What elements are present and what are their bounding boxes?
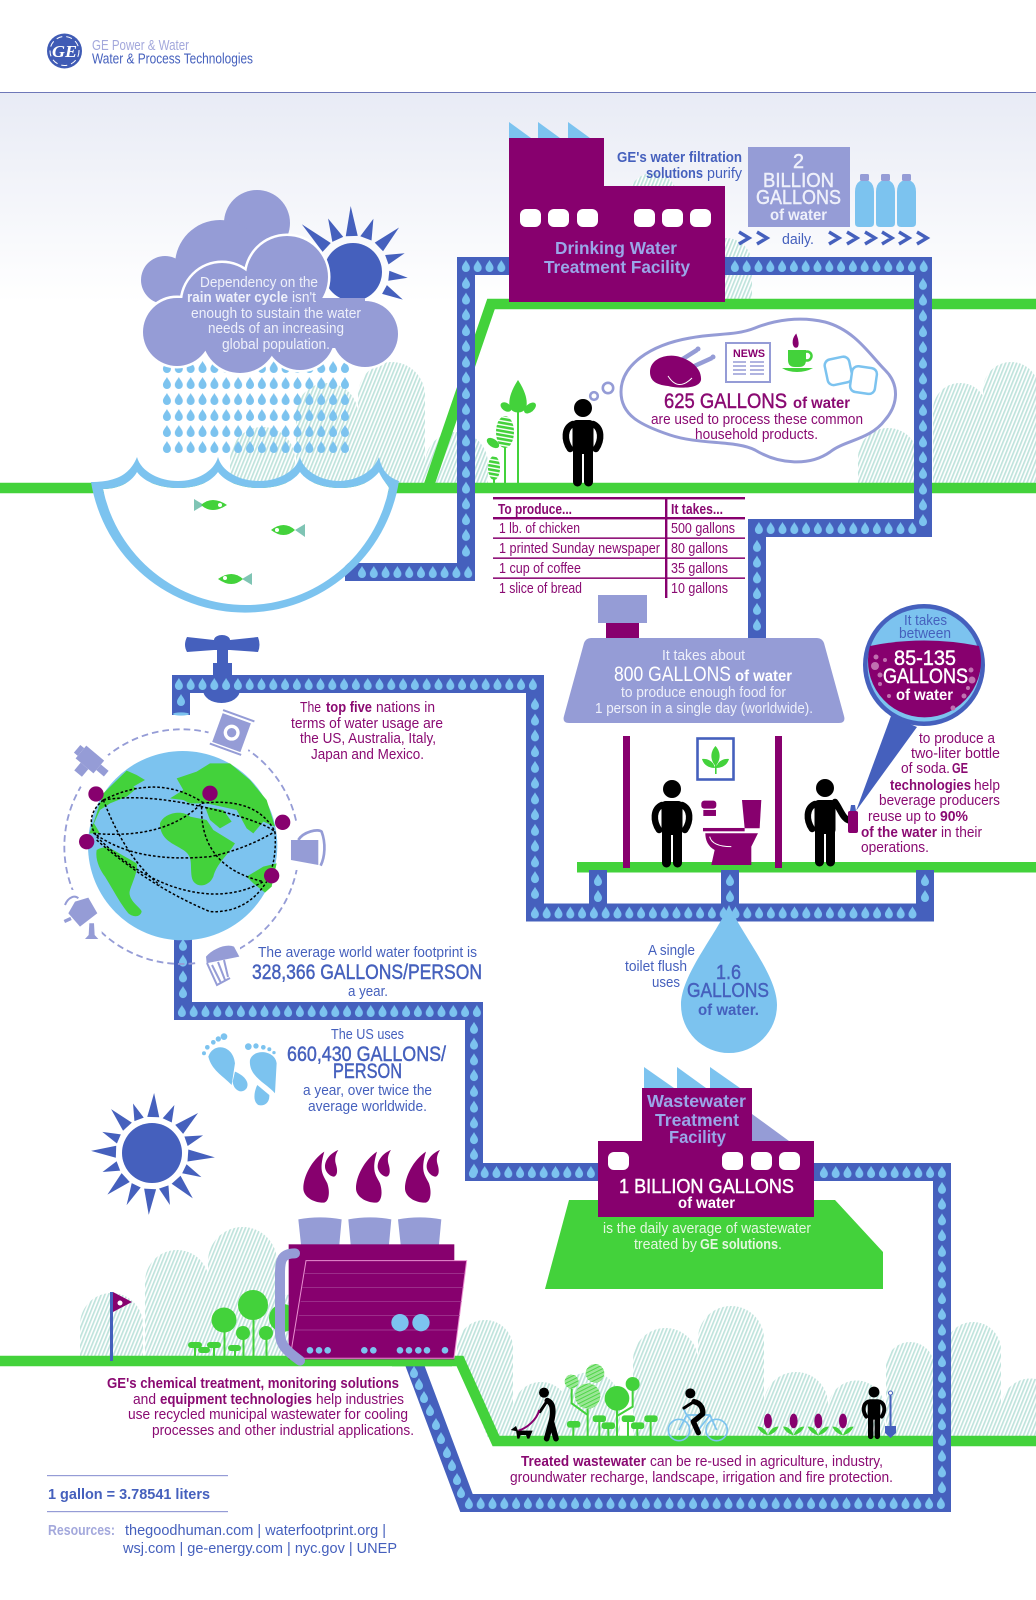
icon: thinking person (566, 399, 600, 482)
footprint text: The average world water footprint is (258, 945, 477, 961)
icon: pitcher (288, 823, 328, 870)
icon: shower head (197, 942, 240, 972)
icon: reuse trees (565, 1364, 658, 1436)
icon: cyclist (668, 1388, 727, 1441)
cloud text: enough to sustain the water (191, 306, 361, 322)
globe-side shower spray (207, 960, 230, 985)
icon: soda bottle (848, 805, 858, 833)
water drops inside pipes (173, 257, 951, 1512)
icon: footprints (202, 1033, 277, 1105)
top five nations text (291, 700, 443, 763)
1 billion gallons text: 1 BILLION GALLONS (619, 1176, 794, 1198)
header rule and sky background (0, 92, 1036, 302)
gauges (307, 1314, 448, 1354)
icon: fish two (271, 524, 305, 537)
factory body (598, 1088, 814, 1217)
chemical treatment caption: GE's chemical treatment, monitoring solutions (107, 1376, 399, 1392)
chemical treatment caption (107, 1376, 414, 1439)
filtration caption (617, 150, 743, 182)
table: water per product: 10 gallons (671, 581, 728, 597)
bubble text: of water (896, 687, 953, 704)
soda caption: of the water (861, 825, 937, 841)
factory body (509, 138, 725, 302)
2 billion gallons box: of water (770, 207, 827, 224)
2 billion gallons box: BILLION (763, 170, 834, 192)
treated wastewater caption: groundwater recharge, landscape, irrigation and fire protection. (510, 1470, 893, 1486)
wastewater caption: treated by (634, 1237, 698, 1253)
hatched background bushes, lower landscape (80, 1227, 1036, 1437)
arrows and daily label: daily. (782, 232, 814, 248)
toilet flush caption: toilet flush (625, 959, 687, 975)
800 gallons text: 1 person in a single day (worldwide). (595, 701, 813, 717)
wastewater caption (603, 1221, 811, 1253)
top five nations text: the US, Australia, Italy, (300, 731, 436, 747)
625 gallons text: 625 GALLONS (664, 390, 787, 413)
factory name: Facility (669, 1127, 726, 1147)
globe with orbit and appliances (57, 706, 328, 972)
1.6 gallons text: GALLONS (687, 980, 769, 1002)
800 gallons text (595, 648, 813, 717)
globe continents (89, 763, 277, 916)
toilet flush caption: uses (652, 975, 680, 991)
icon: tap (57, 735, 117, 795)
panel: food roof building (564, 595, 844, 723)
table: water per product: 80 gallons (671, 541, 728, 557)
GE logo (47, 34, 82, 68)
wastewater caption: is the daily average of wastewater (603, 1221, 811, 1237)
625 gallons text: are used to process these common (651, 412, 863, 428)
footprint text (252, 945, 482, 1000)
icon: water bottles (855, 174, 916, 227)
company name: Water & Process Technologies (92, 52, 253, 68)
pond bowl (91, 457, 399, 613)
resources: thegoodhuman.com | waterfootprint.org | (125, 1523, 386, 1539)
soda caption: operations. (861, 840, 929, 856)
factory roof triangles (509, 122, 590, 138)
icon: faucet (173, 635, 260, 716)
wastewater caption: GE solutions (700, 1237, 778, 1253)
625 gallons text (651, 390, 863, 443)
cloud text: global population. (222, 337, 330, 353)
toilet flush caption: A single (648, 943, 695, 959)
icon: watering can (60, 890, 102, 940)
green ground lines (0, 304, 1036, 1441)
table: water per product: To produce... (498, 502, 572, 518)
icon: turkey (650, 346, 716, 388)
globe ocean (88, 751, 277, 940)
icon: tulips (757, 1414, 854, 1435)
625 gallons text: of water (793, 395, 850, 412)
soda caption: 90% (940, 809, 968, 825)
800 gallons text: to produce enough food for (621, 685, 786, 701)
icon: flag (110, 1292, 132, 1361)
soda caption: reuse up to (868, 809, 936, 825)
icon: coffee cup (782, 335, 813, 372)
wastewater caption: . (778, 1237, 782, 1253)
rear roof (752, 1114, 789, 1141)
1 billion gallons text (619, 1176, 794, 1212)
soda caption: beverage producers (879, 793, 1000, 809)
800 gallons text: It takes about (662, 648, 745, 664)
top five nations text: top five (326, 700, 372, 716)
top five nations text: nations in (376, 700, 435, 716)
table: water per product: 1 cup of coffee (499, 561, 581, 577)
cloud text: needs of an increasing (208, 321, 344, 337)
chemical treatment caption: help industries (316, 1392, 404, 1408)
soda caption: of soda. (901, 761, 950, 777)
bubble text: It takes (904, 613, 947, 629)
800 gallons text: 800 GALLONS (614, 663, 731, 686)
filtration caption: GE's water filtration (617, 150, 742, 166)
chemical treatment caption: and (133, 1392, 156, 1408)
wastewater treatment facility (598, 1067, 814, 1217)
icon: framed plant (698, 738, 734, 780)
cloud text (187, 275, 361, 353)
US usage text: PERSON (333, 1060, 402, 1083)
green wastewater platform (545, 1200, 883, 1289)
bubble text (883, 613, 968, 704)
filtration caption: solutions (646, 166, 703, 182)
chemical treatment caption: use recycled municipal wastewater for cooling (128, 1407, 408, 1423)
bubble text: between (899, 626, 951, 642)
soda caption: help (974, 778, 1000, 794)
building posts (623, 736, 782, 868)
icon: lower sun (91, 1093, 215, 1215)
footprint text: a year. (348, 984, 388, 1000)
appliance icons (57, 706, 328, 972)
roof triangles (644, 1067, 740, 1088)
icon: trees (485, 380, 538, 483)
factory windows (520, 209, 711, 227)
cloud text: isn't (292, 290, 316, 306)
icon: person walking dog (511, 1388, 556, 1439)
table: water per product: 1 printed Sunday newspaper (499, 541, 660, 557)
rain drops (161, 359, 351, 455)
table: water per product: 35 gallons (671, 561, 728, 577)
table: water per product: 1 lb. of chicken (499, 521, 580, 537)
resources (48, 1523, 397, 1557)
icon: fish three (218, 573, 252, 585)
icon: toilet (701, 800, 761, 865)
footprint text: 328,366 GALLONS/PERSON (252, 961, 482, 984)
company name (92, 38, 253, 68)
gallon conversion: 1 gallon = 3.78541 liters (48, 1487, 210, 1503)
US usage text: average worldwide. (308, 1099, 427, 1115)
2 billion gallons box: GALLONS (756, 187, 841, 209)
resources: Resources: (48, 1523, 115, 1539)
table: water per product: 1 slice of bread (499, 581, 582, 597)
green floor (577, 862, 1036, 872)
top five nations text: The (300, 700, 321, 716)
factory name: Treatment Facility (544, 257, 690, 277)
icon: newspaper (726, 343, 770, 382)
treated wastewater caption: can be re-used in agriculture, industry, (650, 1454, 883, 1470)
table: water per product (493, 497, 745, 598)
table: water per product: 500 gallons (671, 521, 735, 537)
icon: fish one (194, 499, 227, 511)
factory name (647, 1091, 746, 1147)
soda callout bubble (856, 604, 985, 811)
soda caption (861, 731, 1000, 856)
company name: GE Power & Water (92, 38, 189, 54)
factory name: Drinking Water (555, 238, 677, 258)
table: water per product: It takes... (671, 502, 723, 518)
800 gallons text: of water (735, 668, 792, 685)
reuse landscape figures (511, 1364, 727, 1441)
factory name: Wastewater (647, 1091, 746, 1111)
steam flames (303, 1150, 440, 1203)
bubble text: GALLONS (883, 665, 968, 688)
chemical treatment caption: equipment technologies (160, 1392, 312, 1408)
cloud text: Dependency on the (200, 275, 318, 291)
icon: sun behind cloud (298, 206, 408, 304)
toilet flush caption (625, 943, 695, 991)
icon: toilet flush water drop (681, 905, 777, 1053)
flight routes (91, 787, 275, 912)
filtration caption: purify (707, 166, 743, 182)
soda bubbles (871, 654, 976, 710)
soda caption: two-liter bottle (911, 746, 1000, 762)
US usage text (287, 1027, 446, 1115)
soda caption: technologies (890, 778, 971, 794)
plant body (289, 1244, 454, 1359)
thought cloud (590, 319, 896, 462)
cooling stacks (298, 1217, 441, 1245)
hose (280, 1253, 300, 1361)
thought bubbles (590, 383, 613, 400)
1.6 gallons text (687, 962, 769, 1019)
icon: trees near plant (188, 1290, 297, 1357)
industrial plant (280, 1150, 467, 1361)
front panel (290, 1261, 467, 1358)
top five nations text: terms of water usage are (291, 716, 443, 732)
cloud text: rain water cycle (187, 290, 288, 306)
resources: wsj.com | ge-energy.com | nyc.gov | UNEP (122, 1541, 397, 1557)
panel: rain cycle cloud (143, 236, 398, 373)
1.6 gallons text: of water. (698, 1002, 759, 1019)
icon: washing machine (204, 706, 259, 759)
factory name (544, 238, 690, 277)
factory name: Treatment (655, 1110, 739, 1130)
2 billion gallons box: 2 (793, 151, 804, 173)
hatched background bushes, upper landscape (230, 173, 1036, 483)
1 billion gallons text: of water (678, 1195, 735, 1212)
icon: person by toilet (655, 780, 689, 863)
factory windows (608, 1152, 800, 1170)
top five nations text: Japan and Mexico. (311, 747, 424, 763)
2 billion gallons box (748, 147, 850, 227)
bubble text: 85-135 (894, 647, 956, 670)
US usage text: a year, over twice the (303, 1083, 432, 1099)
soda caption: to produce a (919, 731, 996, 747)
soda caption: GE (952, 761, 968, 777)
icon: person with shovel (864, 1387, 896, 1438)
drinking water treatment facility (509, 122, 725, 302)
panel lines (295, 1273, 465, 1330)
GE logo: GE (52, 42, 77, 61)
icon: person with soda bottle (808, 779, 851, 862)
treated wastewater caption (510, 1454, 893, 1486)
1.6 gallons text: 1.6 (716, 962, 741, 984)
chemical treatment caption: processes and other industrial applications. (152, 1423, 414, 1439)
soda caption: in their (941, 825, 982, 841)
top nation pins (79, 786, 290, 883)
icon: bread slices (824, 356, 878, 395)
water pipes (181, 266, 942, 1503)
625 gallons text: household products. (695, 427, 818, 443)
treated wastewater caption: Treated wastewater (521, 1454, 646, 1470)
arrows and daily label (739, 232, 927, 248)
icon: newspaper: NEWS (733, 348, 765, 360)
icon: back cloud (141, 190, 290, 310)
dashed orbit (64, 729, 299, 964)
US usage text: 660,430 GALLONS/ (287, 1043, 446, 1066)
US usage text: The US uses (331, 1027, 404, 1043)
